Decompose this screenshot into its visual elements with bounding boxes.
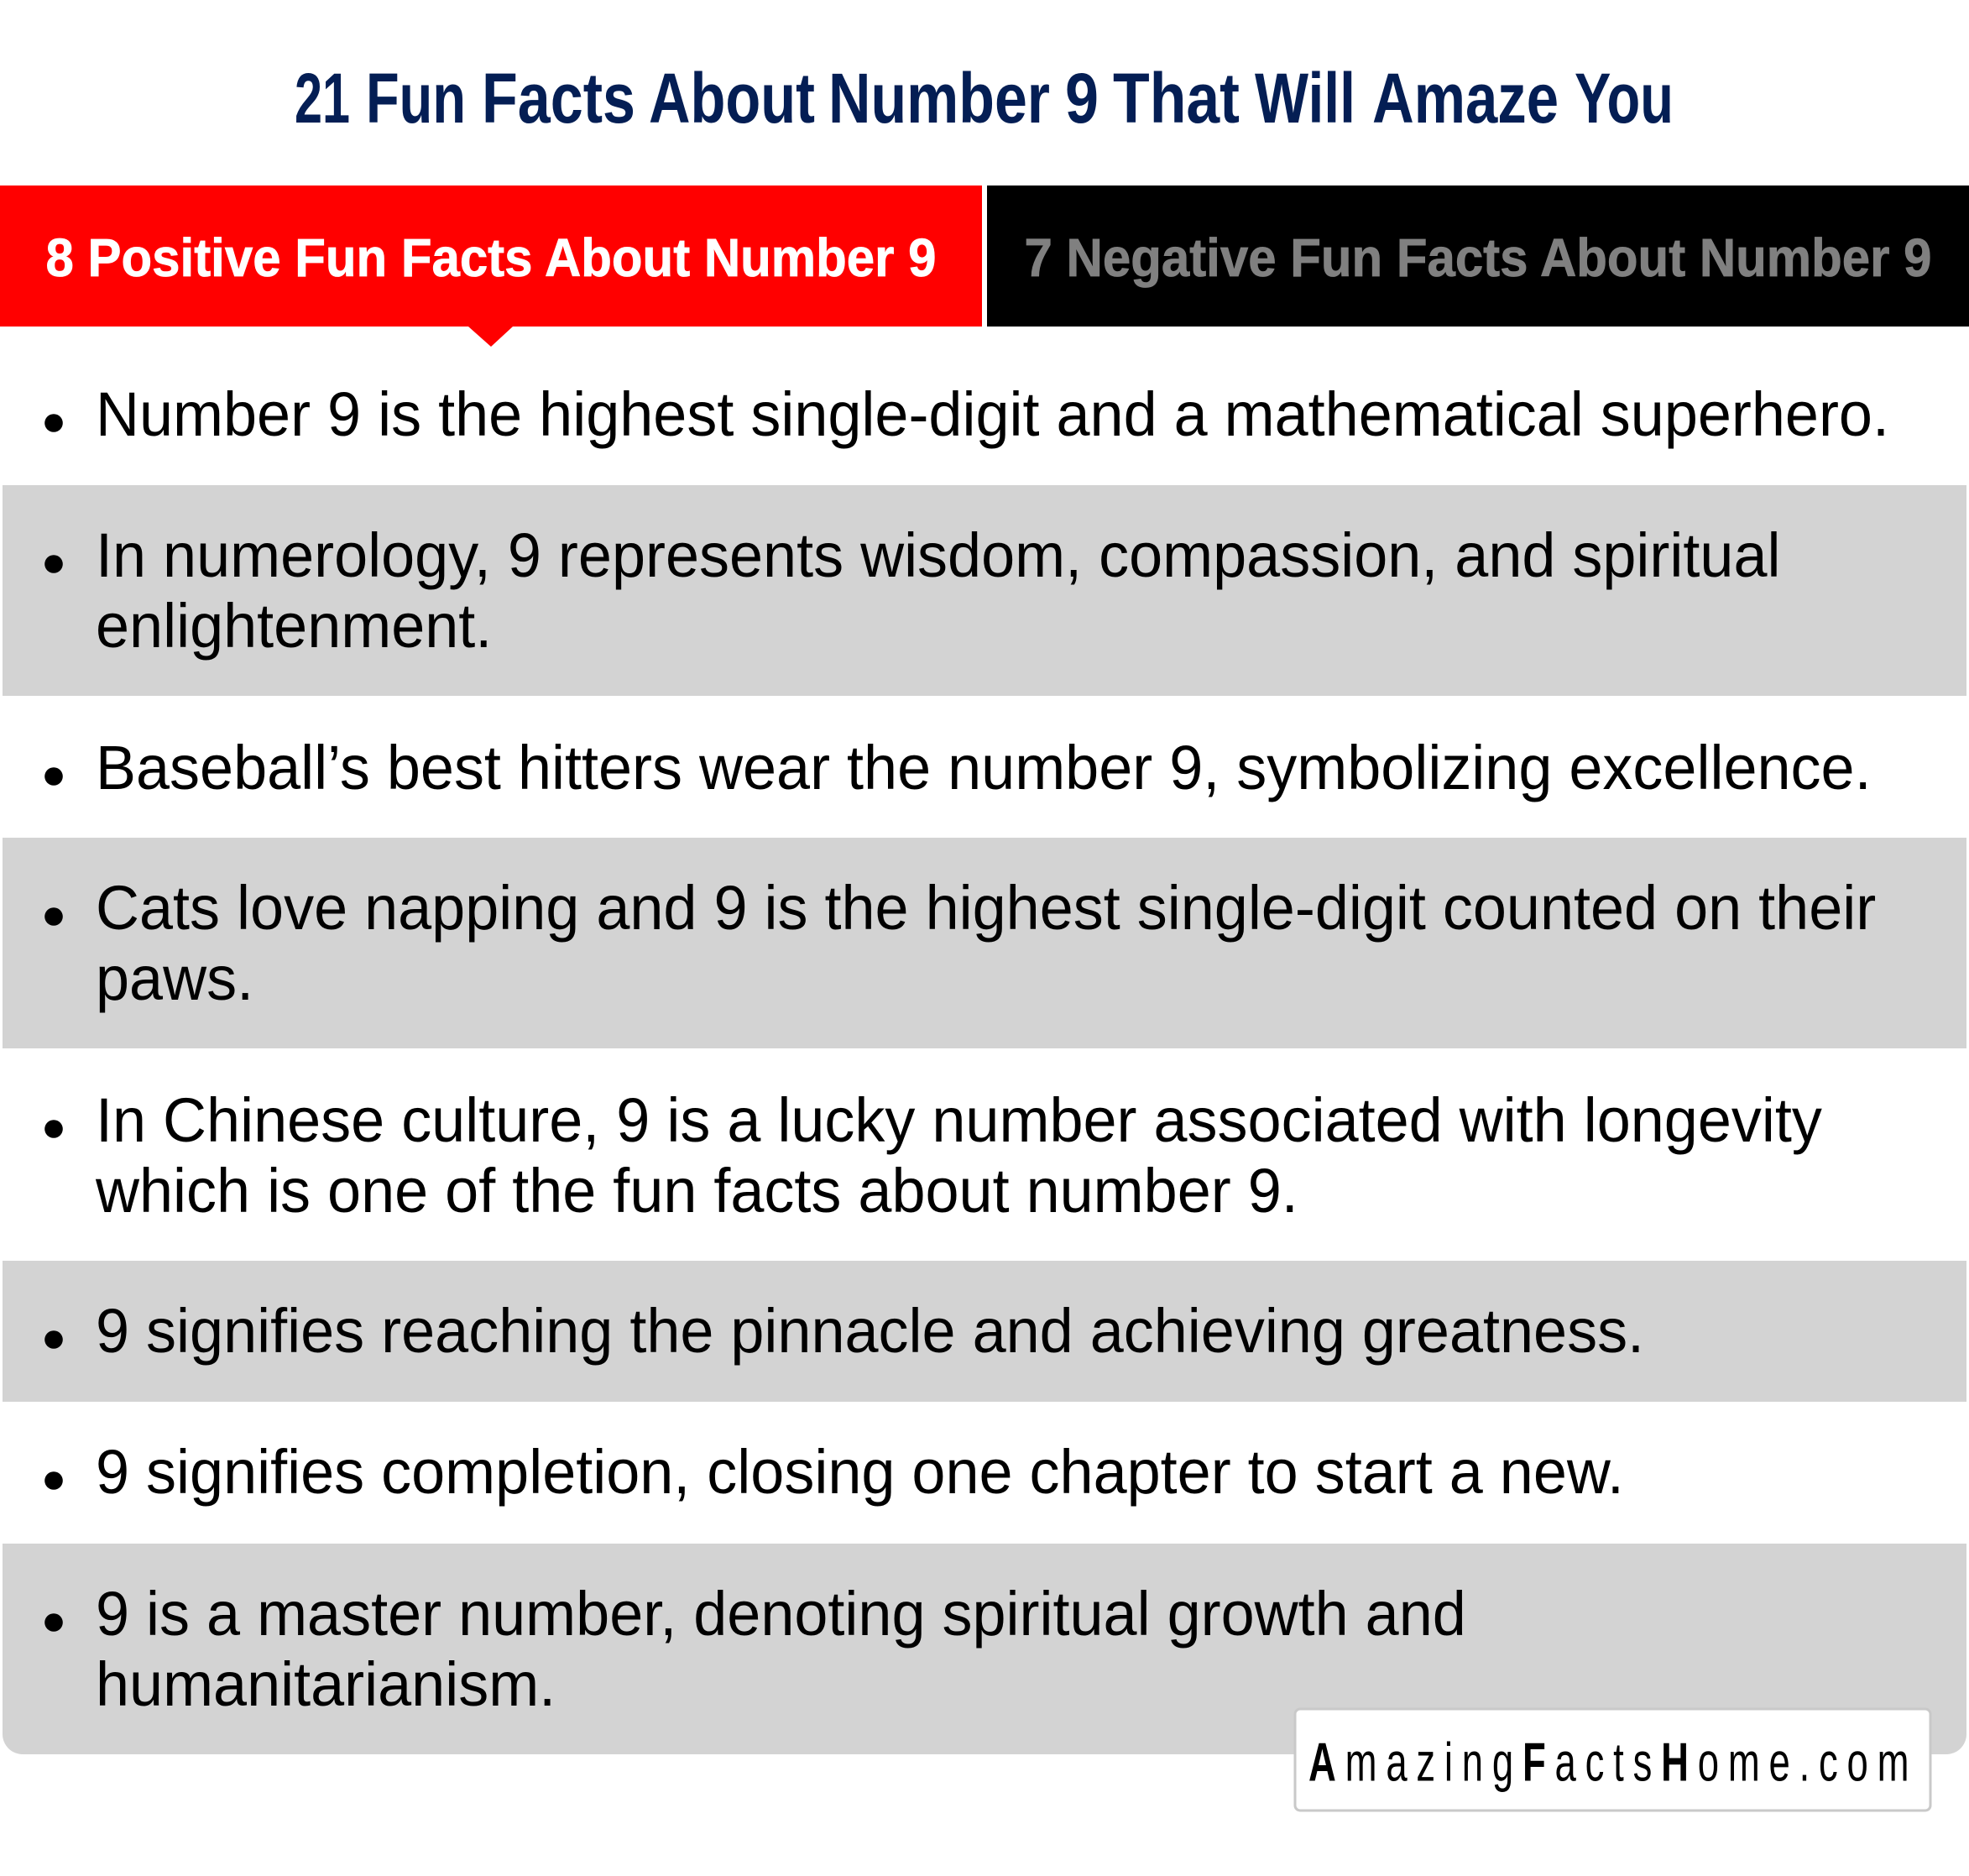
fact row 4: [3, 838, 1966, 1048]
title: [295, 59, 1674, 138]
fact row 7: 9 signifies completion, closing one chapter to start a new.: [96, 1438, 1624, 1507]
fact row 1: Number 9 is the highest single-digit and a mathematical superhero.: [96, 380, 1889, 449]
fact row 4: paws.: [96, 944, 253, 1013]
title: Will: [1255, 59, 1355, 138]
fact row 2: enlightenment.: [96, 592, 492, 661]
title: That: [1113, 59, 1240, 138]
fact row 3: Baseball’s best hitters wear the number 9, symbolizing excellence.: [96, 734, 1872, 802]
tab: positive facts: 8 Positive Fun Facts About Number 9: [45, 228, 937, 288]
tab: negative facts: 7 Negative Fun Facts About Number 9: [1024, 228, 1932, 288]
title: 21: [295, 59, 350, 138]
fact row 8: humanitarianism.: [96, 1650, 556, 1719]
fact row 2: In numerology, 9 represents wisdom, compassion, and spiritual: [96, 521, 1780, 590]
title: About: [649, 59, 815, 138]
title: You: [1575, 59, 1674, 138]
tab: negative facts: [987, 186, 1969, 327]
title: Number: [828, 59, 1050, 138]
fact row 4: Cats love napping and 9 is the highest single-digit counted on their: [96, 874, 1876, 943]
title: Amaze: [1372, 59, 1559, 138]
fact row 6: [3, 1261, 1966, 1402]
title: Facts: [482, 59, 635, 138]
fact row 2: [3, 485, 1966, 696]
title: 9: [1065, 59, 1099, 138]
fact row 6: 9 signifies reaching the pinnacle and achieving greatness.: [96, 1297, 1644, 1366]
fact row 5: In Chinese culture, 9 is a lucky number associated with longevity: [96, 1086, 1822, 1155]
tab: positive facts: [0, 186, 982, 347]
fact row 8: 9 is a master number, denoting spiritual growth and: [96, 1580, 1466, 1649]
watermark badge: AmazingFactsHome.com: [1308, 1731, 1918, 1792]
title: Fun: [366, 59, 466, 138]
fact row 5: which is one of the fun facts about number 9.: [95, 1157, 1298, 1225]
fact row 5: [44, 1086, 1822, 1225]
fact row 8: [3, 1544, 1966, 1754]
watermark badge: [1295, 1709, 1930, 1811]
